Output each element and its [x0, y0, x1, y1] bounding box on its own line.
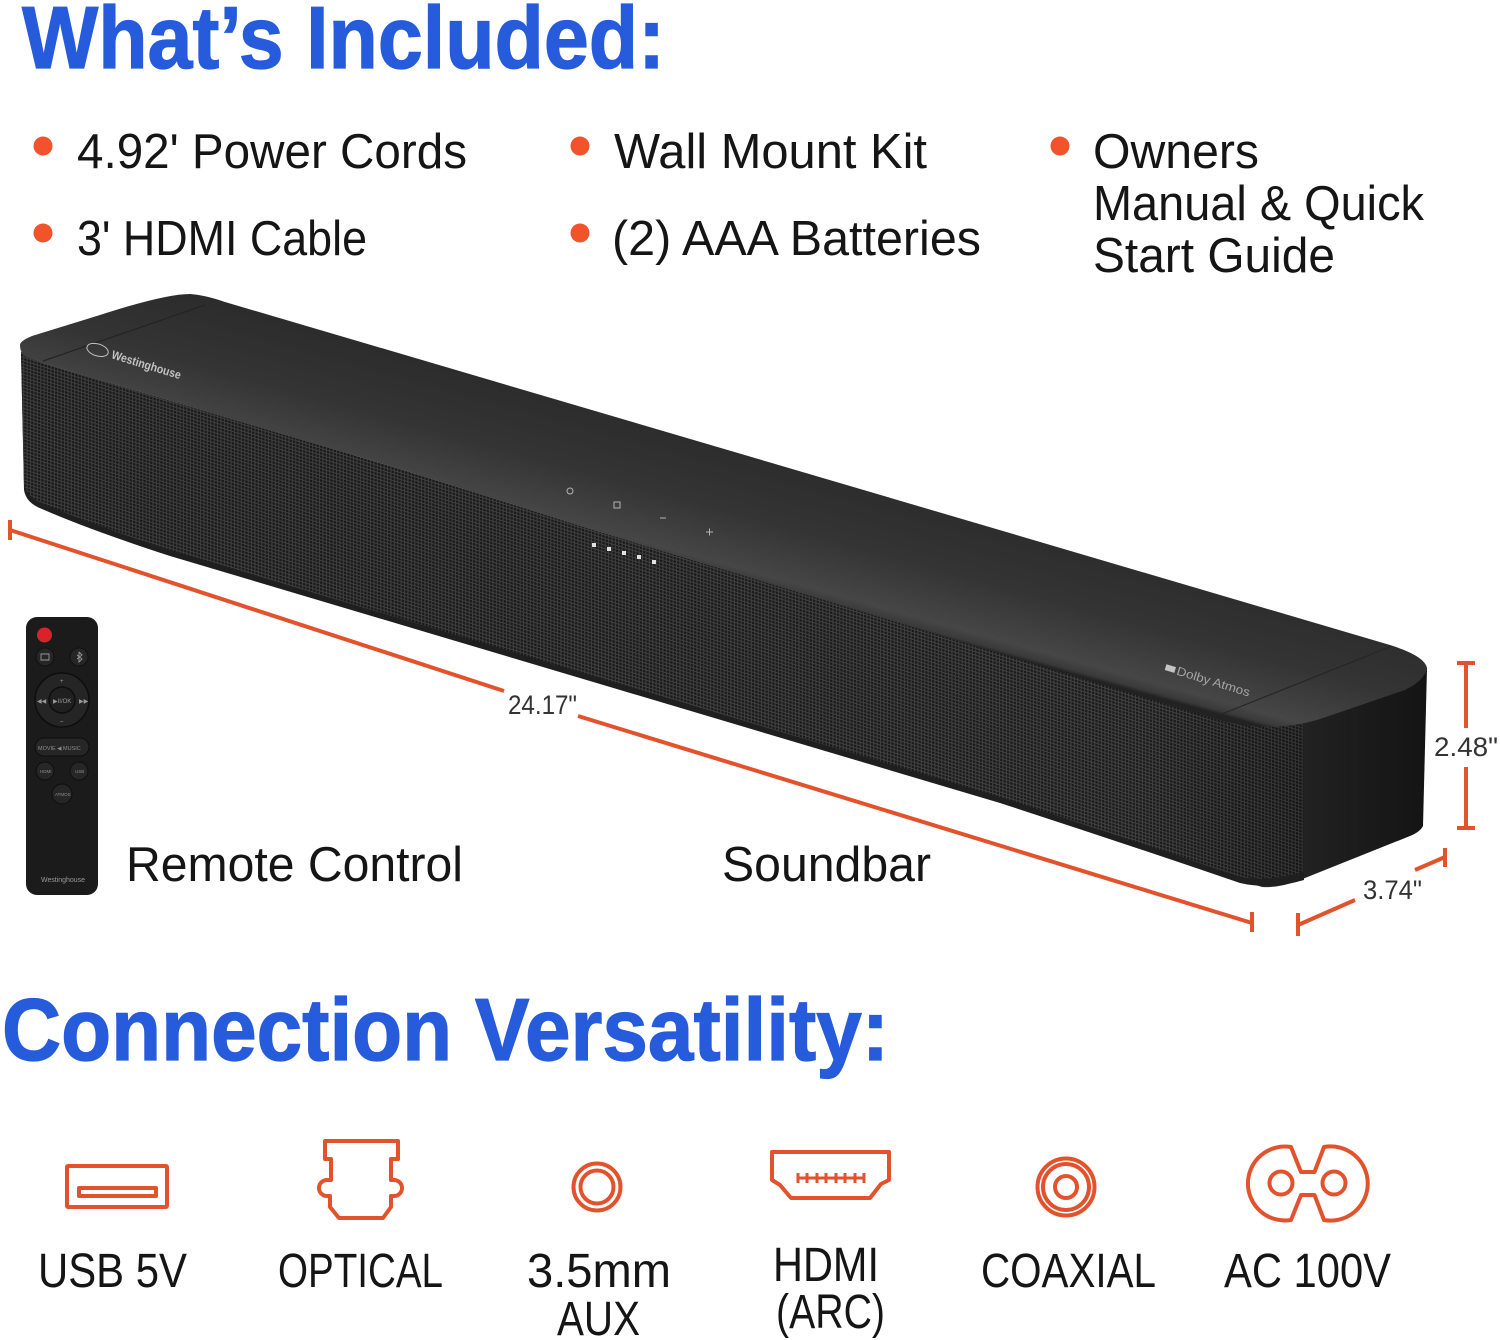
input and bluetooth buttons — [36, 648, 88, 666]
HDMI USB and ATMOS buttons — [36, 762, 88, 804]
bullet: manual — [1050, 136, 1070, 156]
soundbar end side — [1240, 668, 1427, 887]
small button labels: USB — [75, 769, 84, 774]
navigation ring — [35, 673, 89, 727]
label: Soundbar: Soundbar — [722, 838, 931, 892]
item: owners manual: Owners — [1093, 125, 1259, 179]
bullet: HDMI cable — [34, 224, 52, 242]
button labels — [37, 679, 89, 725]
logo: Dolby Atmos: Dolby Atmos — [1175, 664, 1252, 700]
button labels: ◀◀ — [37, 699, 47, 705]
grille shading — [21, 352, 1303, 879]
dimension: width 24.17 — [10, 520, 1252, 932]
logo: Dolby Atmos — [1164, 660, 1252, 700]
dimension: width 24.17: 24.17" — [508, 690, 577, 720]
connection: HDMI: (ARC) — [776, 1286, 885, 1339]
icon: HDMI port — [772, 1152, 889, 1198]
connection: AUX — [527, 1164, 671, 1340]
small button labels: ATMOS — [55, 792, 71, 797]
connection: AC power: AC 100V — [1224, 1245, 1391, 1298]
dimension: depth 3.74 — [1298, 848, 1445, 936]
item: owners manual: Manual & Quick — [1093, 177, 1424, 231]
soundbar front body — [21, 352, 1304, 886]
item: owners manual — [1093, 125, 1424, 283]
button labels: + — [60, 679, 64, 685]
bullet: power cords — [34, 136, 52, 156]
LED indicators — [592, 543, 656, 564]
connection: HDMI — [772, 1152, 889, 1339]
icon: coaxial jack — [1038, 1158, 1094, 1216]
power button — [37, 628, 52, 642]
heading: Connection Versatility: Connection Versatility: — [2, 980, 889, 1079]
item: power cords: 4.92' Power Cords — [77, 125, 467, 179]
touch controls — [567, 488, 713, 536]
item: batteries: (2) AAA Batteries — [612, 212, 981, 266]
bullet: batteries — [570, 224, 590, 242]
list: included items — [34, 125, 1424, 283]
dimension: depth 3.74: 3.74" — [1363, 875, 1422, 905]
item: wall mount kit: Wall Mount Kit — [614, 125, 927, 179]
connection: AC power — [1224, 1146, 1391, 1298]
top seam left — [43, 305, 205, 361]
item: owners manual: Start Guide — [1093, 229, 1335, 283]
logo: Westinghouse — [85, 340, 183, 382]
icon: USB port — [67, 1166, 167, 1207]
icon: AC socket — [1248, 1146, 1368, 1221]
connection: coaxial — [981, 1158, 1156, 1298]
connection: USB — [38, 1166, 187, 1298]
connection: optical — [278, 1141, 443, 1298]
bullet: wall mount — [570, 136, 590, 156]
mode pill — [35, 738, 89, 756]
dimension: height 2.48: 2.48" — [1434, 732, 1498, 762]
button labels: ▶II/OK — [53, 699, 71, 705]
connection: HDMI: HDMI — [773, 1239, 879, 1292]
item: HDMI cable: 3' HDMI Cable — [77, 212, 367, 266]
remote body — [26, 617, 98, 895]
top seam right — [1222, 646, 1392, 714]
button labels: ▶▶ — [79, 699, 89, 705]
small button labels: HDMI — [40, 769, 52, 774]
icon: optical port — [319, 1141, 402, 1218]
connection: AUX: 3.5mm — [527, 1245, 671, 1298]
button labels: – — [60, 719, 64, 725]
soundbar front grille — [21, 352, 1303, 879]
connection: optical: OPTICAL — [278, 1245, 443, 1298]
remote brand: Westinghouse — [41, 875, 85, 884]
pill labels: MOVIE ◀ MUSIC — [38, 746, 81, 752]
remote control — [26, 617, 98, 895]
icon: AUX jack — [574, 1164, 620, 1210]
soundbar top face — [20, 294, 1427, 727]
input and bluetooth glyphs — [41, 652, 82, 662]
connection: USB: USB 5V — [38, 1245, 187, 1298]
small button labels — [40, 769, 84, 797]
logo: Westinghouse: Westinghouse — [110, 348, 183, 382]
soundbar — [20, 294, 1427, 887]
connection: coaxial: COAXIAL — [981, 1245, 1156, 1298]
label: Remote Control: Remote Control — [126, 838, 463, 892]
dimension: height 2.48 — [1434, 663, 1498, 828]
